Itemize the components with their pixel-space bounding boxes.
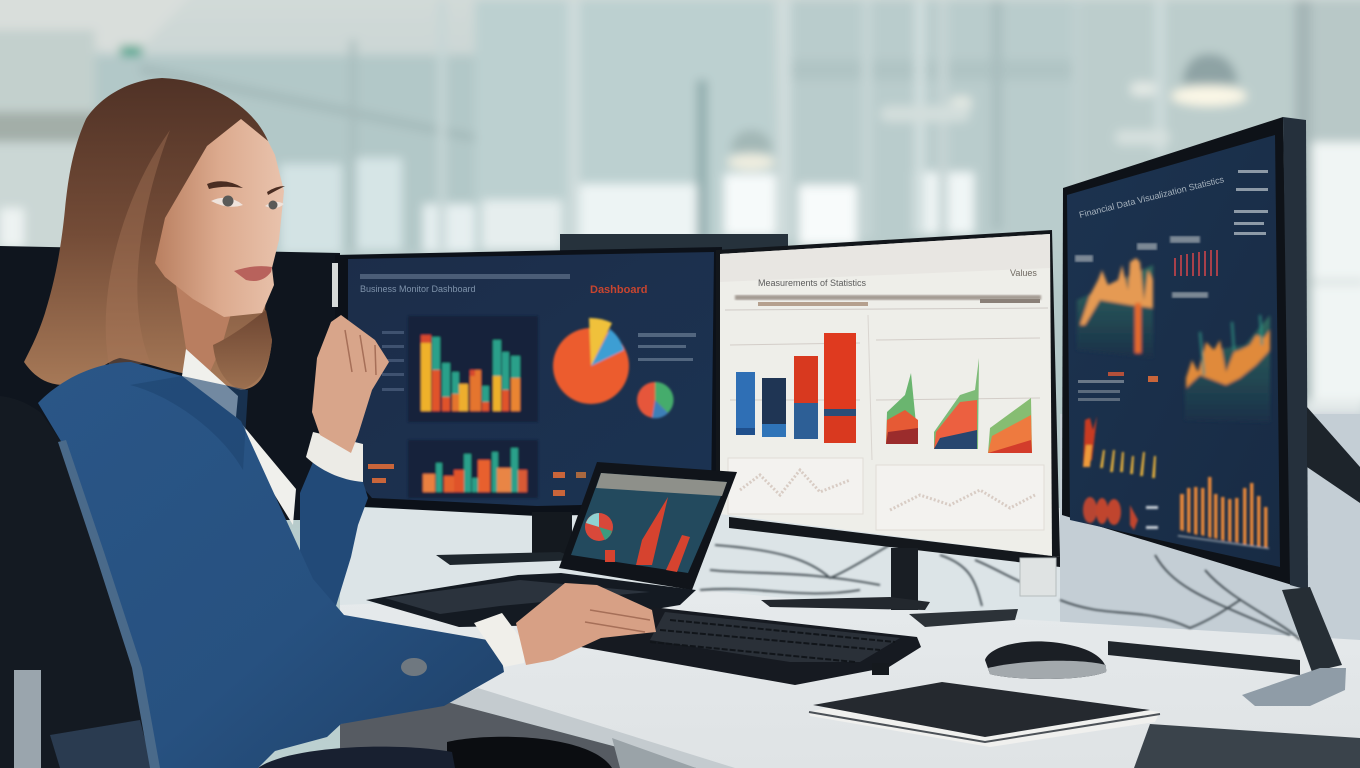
desk surface [340,590,1360,768]
neck [176,285,232,372]
monitor 3 chart: lower right [1178,477,1269,549]
monitor 3 arm and stand [1108,407,1360,706]
back hair [24,78,272,390]
woman [0,78,656,768]
monitor 3 chart: upper right [1174,250,1270,422]
monitor 2 stand [729,517,1060,627]
under desk and chair seat [258,702,696,768]
face [155,119,284,317]
keyboard front [581,607,921,685]
monitor 3 chart: upper left [1077,258,1153,358]
ceiling lamps [1171,86,1247,106]
laptop pie [585,513,613,541]
monitor 1 lower bar chart [408,440,538,498]
monitor 2 area charts [876,338,1040,453]
monitor 3 chart: lower left [1083,416,1158,530]
cuff raised [306,432,363,482]
monitor 2: white report: Values [1010,268,1037,278]
monitor 3: right dark dashboard [1062,117,1308,590]
laptop rising bars [636,497,668,565]
monitor 2 heading: Measurements of Statistics [758,278,867,288]
monitor 3 heading: Financial Data Visualization Statistics [1078,174,1225,220]
notebook [809,682,1160,747]
right hair lock over neck [213,310,272,390]
hair strand highlight [106,130,170,370]
jacket [38,362,504,768]
far desk surface [340,508,1062,640]
raised sleeve [300,462,368,606]
raised hand [312,315,389,453]
monitor 1 heading: Business Monitor Dashboard [360,284,476,294]
white shirt collar [182,349,296,525]
jacket button [401,658,427,676]
monitor 1 pie chart [553,318,629,404]
laptop [559,462,737,590]
cuff lower [474,613,524,667]
monitor 1 stand [532,512,572,560]
monitor 1: dark dashboard: Dashboard [590,284,647,296]
jacket lapel shading [130,376,248,470]
monitor 2 faint line charts [728,458,1044,530]
monitor 1: dark dashboard [332,247,722,516]
mouse [985,641,1106,679]
monitor 2 bar chart [730,333,860,443]
brows, eyes, lips [207,181,285,281]
chair [0,396,160,768]
keyboard left [366,573,696,627]
monitor 3 left text [1078,380,1124,383]
monitor 2: white report [716,230,1060,557]
lower hand [516,583,656,665]
monitor 1 bar chart [408,316,538,422]
cables [700,545,1300,640]
monitor 1 small pie chart [637,382,674,418]
dark back screen behind woman [0,246,340,520]
